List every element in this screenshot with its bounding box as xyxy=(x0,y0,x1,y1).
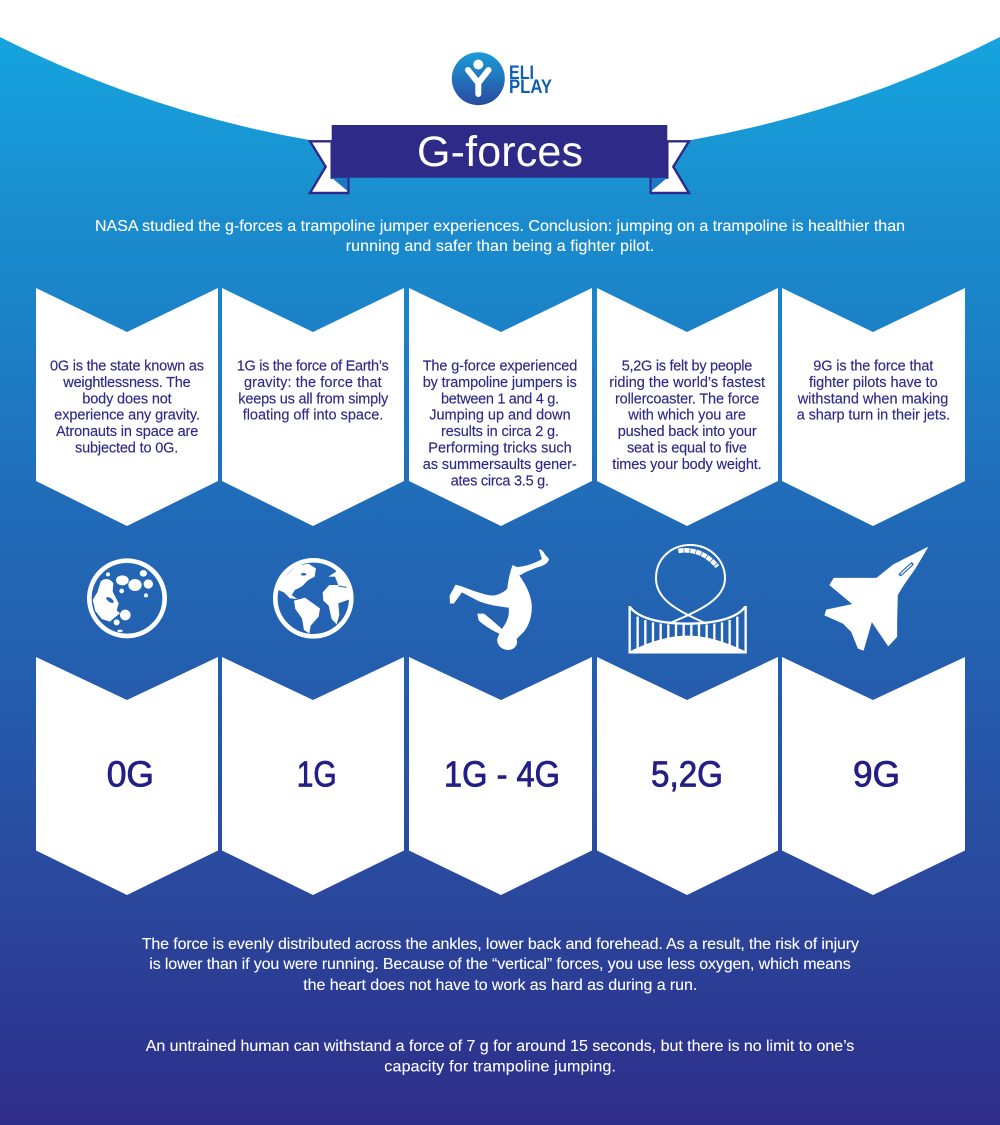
description card: 5,2G: pushed back into your xyxy=(618,424,757,440)
ribbon left tail xyxy=(310,141,348,193)
description card: 1G: keeps us all from simply xyxy=(238,391,389,407)
value card: 1G-4G: 1G - 4G xyxy=(444,754,560,795)
description card: 9G: withstand when making xyxy=(797,391,948,407)
intro text: NASA studied the g-forces a trampoline jumper experiences. Conclusion: jumping on a trampoline is healthier than xyxy=(95,218,905,235)
title text: G-forces xyxy=(417,128,583,176)
icon: trampoline jumper xyxy=(450,550,549,650)
logo: Eli Play xyxy=(452,52,552,105)
value card: 9G xyxy=(782,657,965,895)
description card: 1G: floating off into space. xyxy=(243,408,383,424)
value card: 5,2G: 5,2G xyxy=(651,754,723,795)
description card: 1G: gravity: the force that xyxy=(244,375,382,391)
description card: 9G: 9G is the force that xyxy=(813,358,933,374)
value card: 5,2G xyxy=(597,657,778,895)
logo: Eli Play: ELI xyxy=(509,63,534,84)
description card: 1G-4G xyxy=(409,288,592,526)
paragraph: force distribution: is lower than if you were running. Because of the “vertical” forces, you use less oxygen, which means xyxy=(149,956,851,973)
description card: 9G: a sharp turn in their jets. xyxy=(797,408,950,424)
description card: 0G: 0G is the state known as xyxy=(50,358,204,374)
paragraph: human limit: An untrained human can withstand a force of 7 g for around 15 seconds, but there is no limit to one’s xyxy=(146,1038,854,1055)
ribbon right tail xyxy=(651,141,689,193)
description card: 1G-4G: Performing tricks such xyxy=(428,440,572,456)
description card: 0G: body does not xyxy=(82,391,172,407)
description card: 5,2G: rollercoaster. The force xyxy=(615,391,759,407)
paragraph: force distribution: The force is evenly distributed across the ankles, lower back and forehead. As a result, the risk of injury xyxy=(142,936,859,953)
value card: 9G: 9G xyxy=(853,754,900,795)
icon: moon xyxy=(89,561,165,636)
intro text xyxy=(95,218,905,255)
ribbon band xyxy=(332,125,667,178)
description card: 1G-4G: between 1 and 4 g. xyxy=(441,391,559,407)
description card: 9G xyxy=(782,288,965,526)
title ribbon xyxy=(310,125,689,193)
logo: Eli Play: PLAY xyxy=(509,77,552,98)
description card: 5,2G: riding the world’s fastest xyxy=(609,375,765,391)
paragraph: human limit: capacity for trampoline jumping. xyxy=(384,1059,616,1076)
description card: 5,2G: seat is equal to five xyxy=(627,440,747,456)
description card: 5,2G: with which you are xyxy=(627,408,746,424)
paragraph: force distribution xyxy=(142,936,859,994)
description card: 1G-4G: ates circa 3.5 g. xyxy=(451,473,549,489)
icon: fighter jet xyxy=(825,548,927,650)
paragraph: human limit xyxy=(146,1038,854,1076)
description card: 1G-4G: Jumping up and down xyxy=(429,408,571,424)
description card: 0G: Atronauts in space are xyxy=(56,424,198,440)
description card: 1G-4G: results in circa 2 g. xyxy=(441,424,559,440)
value card: 0G xyxy=(36,657,218,895)
description card: 1G-4G: The g-force experienced xyxy=(423,358,577,374)
value card: 1G: 1G xyxy=(297,754,337,795)
value card: 0G: 0G xyxy=(107,754,154,795)
icon: rollercoaster xyxy=(629,545,746,653)
value card: 1G-4G xyxy=(409,657,592,895)
paragraph: force distribution: the heart does not have to work as hard as during a run. xyxy=(303,977,697,994)
description card: 1G-4G: by trampoline jumpers is xyxy=(423,375,577,391)
description card: 9G: fighter pilots have to xyxy=(809,375,938,391)
description card: 5,2G: times your body weight. xyxy=(612,457,762,473)
description card: 0G: experience any gravity. xyxy=(54,408,200,424)
description card: 1G: 1G is the force of Earth’s xyxy=(237,358,389,374)
description card: 0G: weightlessness. The xyxy=(62,375,191,391)
value card: 1G xyxy=(222,657,404,895)
description card: 5,2G xyxy=(597,288,778,526)
icon: earth xyxy=(275,560,353,636)
description card: 0G: subjected to 0G. xyxy=(75,440,178,456)
description card: 0G xyxy=(36,288,218,526)
description card: 5,2G: 5,2G is felt by people xyxy=(622,358,752,374)
intro text: running and safer than being a fighter pilot. xyxy=(346,238,654,255)
description card: 1G-4G: as summersaults gener- xyxy=(423,457,577,473)
description card: 1G xyxy=(222,288,404,526)
